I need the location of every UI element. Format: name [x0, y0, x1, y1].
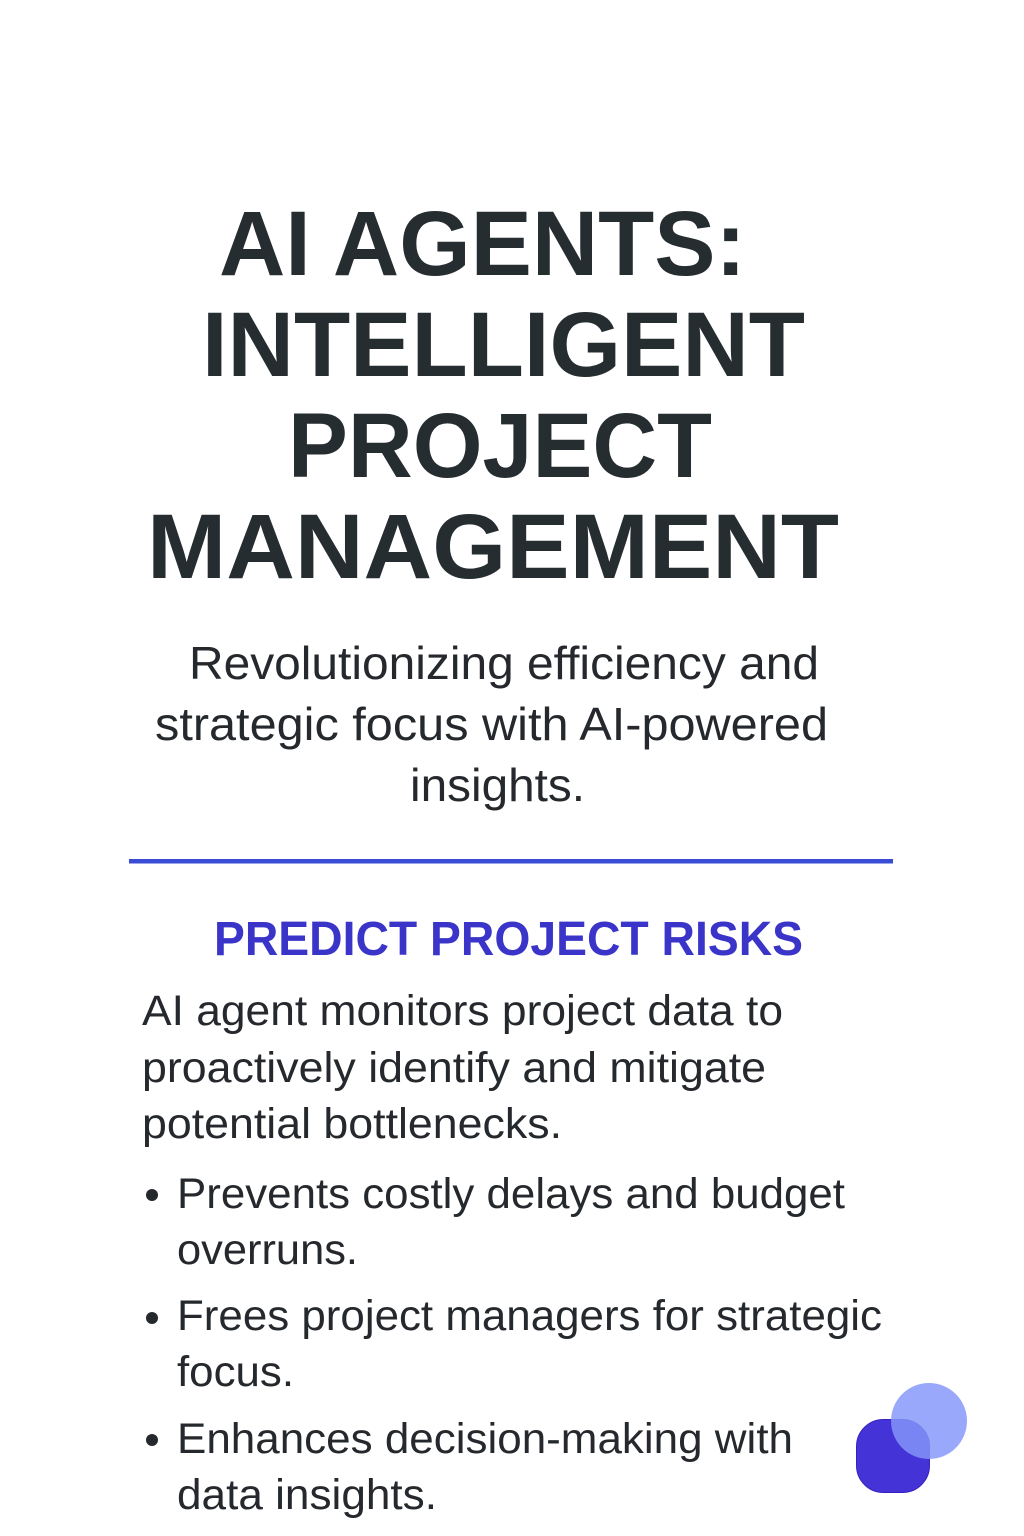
body paragraph	[142, 988, 783, 1148]
title: PROJECT	[288, 395, 712, 497]
title	[147, 193, 839, 598]
subtitle: Revolutionizing efficiency and	[189, 637, 819, 689]
bullet 1	[146, 1171, 845, 1274]
icon: overlapping shapes logo	[856, 1383, 967, 1492]
bullet 2	[146, 1293, 882, 1396]
bullet 3: data insights.	[177, 1472, 437, 1519]
bullet 1: Prevents costly delays and budget	[177, 1171, 845, 1218]
bullet 2: Frees project managers for strategic	[177, 1293, 882, 1340]
body paragraph: AI agent monitors project data to	[142, 988, 783, 1035]
bullet list	[146, 1171, 882, 1519]
section heading: predict project risks: PREDICT PROJECT RISKS	[214, 913, 803, 966]
title: MANAGEMENT	[147, 496, 839, 598]
bullet 1: overruns.	[177, 1227, 358, 1274]
body paragraph: potential bottlenecks.	[142, 1101, 562, 1148]
bullet 3	[146, 1416, 793, 1519]
title: AI AGENTS:	[219, 193, 746, 295]
divider line	[129, 859, 893, 864]
bullet 3: Enhances decision-making with	[177, 1416, 793, 1463]
subtitle: strategic focus with AI-powered	[155, 698, 828, 750]
title: INTELLIGENT	[202, 294, 805, 396]
subtitle: insights.	[410, 759, 585, 811]
subtitle	[155, 637, 828, 811]
bullet 2: focus.	[177, 1349, 294, 1396]
body paragraph: proactively identify and mitigate	[142, 1045, 766, 1092]
